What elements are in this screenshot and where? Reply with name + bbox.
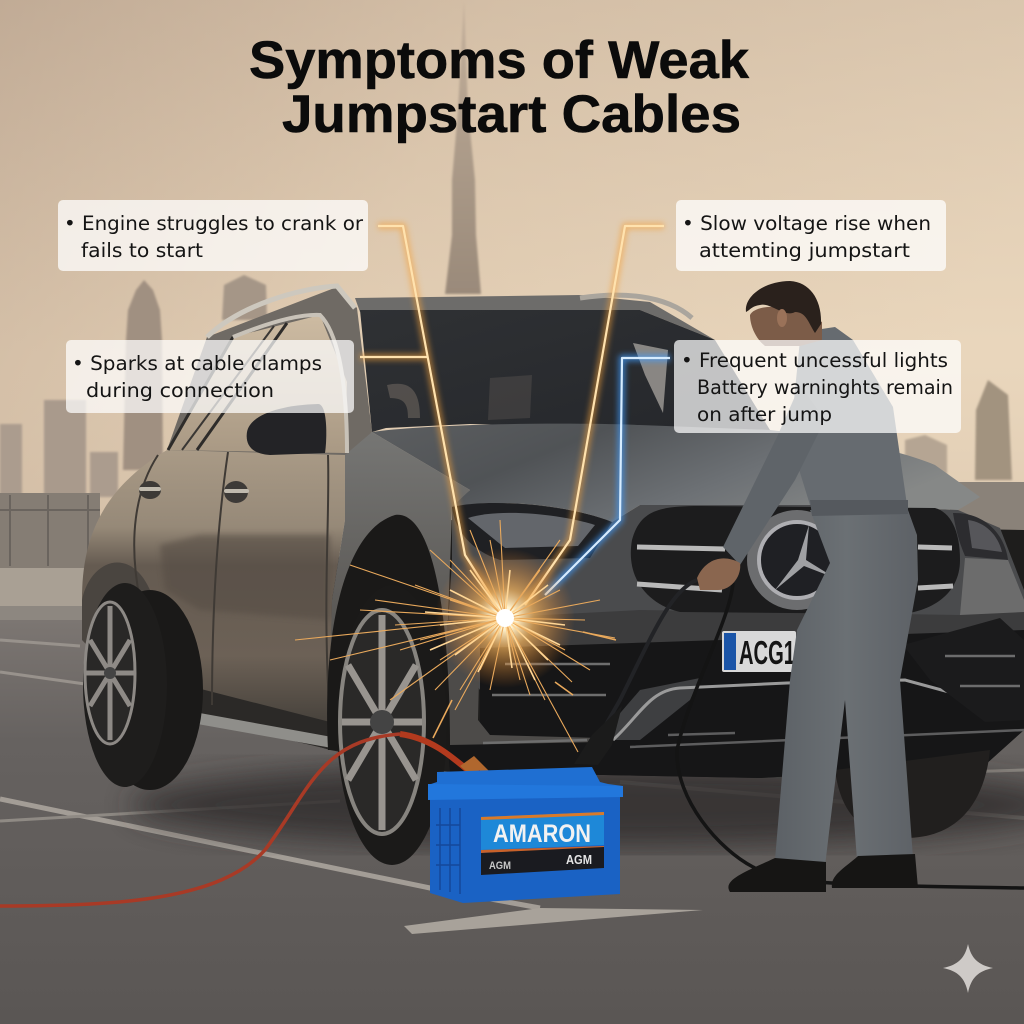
callout: warnings: [674, 340, 961, 433]
side mirror: [247, 404, 326, 455]
face and neck: [750, 307, 822, 346]
callout: engine: [58, 200, 368, 271]
city skyline: [0, 0, 1012, 504]
callout: warnings: Battery warninghts remain: [697, 376, 953, 399]
front fascia: [447, 503, 1024, 690]
car: [82, 286, 1024, 865]
license plate: [722, 631, 796, 672]
far rail: [580, 295, 692, 318]
emblem: [747, 510, 847, 610]
windshield: [360, 310, 770, 432]
neon callout lines: [360, 226, 670, 618]
torso: [790, 327, 907, 505]
black cable two: [677, 583, 1024, 888]
battery: AMARON: [493, 820, 591, 848]
callout: voltage: • Slow voltage rise when: [682, 212, 931, 235]
callout: sparks: during connection: [86, 379, 274, 402]
front wheel: [327, 515, 450, 865]
jumper cables: [0, 580, 1024, 906]
hand: [697, 558, 740, 590]
shoes: [728, 858, 826, 892]
car shadow: [130, 763, 1024, 847]
lower bumper black: [447, 630, 1024, 778]
license plate: ACG1: [739, 634, 795, 671]
side step: [172, 708, 332, 748]
battery top deck: [428, 767, 623, 795]
door seams: [134, 452, 330, 722]
hair: [746, 281, 821, 333]
sky background: [0, 0, 1024, 640]
headlight: [452, 503, 612, 560]
right lower mesh: [903, 618, 1024, 722]
chrome sweep: [597, 678, 1024, 747]
callout: sparks: • Sparks at cable clamps: [72, 352, 322, 375]
battery: [428, 767, 623, 903]
red cable: [0, 734, 400, 906]
battery body: [430, 795, 620, 903]
door reflection: [160, 535, 330, 620]
grille slats: [637, 547, 953, 590]
right bumper corner: [960, 558, 1024, 615]
far front wheel: [835, 750, 990, 838]
black cable one: [600, 580, 697, 735]
legs: [775, 510, 918, 866]
side lower panel: [447, 620, 600, 745]
battery label: [481, 812, 604, 850]
ear: [777, 309, 787, 327]
callout: warnings: on after jump: [697, 403, 832, 426]
fender: [328, 432, 470, 750]
bumper band: [447, 600, 1024, 650]
man: [697, 281, 918, 892]
belt: [810, 500, 908, 516]
lower grille slats: [483, 664, 610, 743]
windshield reflections: [387, 343, 668, 420]
arm: [723, 385, 825, 565]
callout: voltage: [676, 200, 946, 271]
icon: sparkle watermark: [943, 944, 993, 993]
callout: voltage: attemting jumpstart: [699, 239, 910, 262]
roof rail: [207, 286, 355, 337]
side windows: [167, 315, 347, 453]
handles: [139, 481, 249, 503]
title: [249, 31, 750, 144]
clamps: [458, 706, 622, 790]
rear arch: [82, 562, 175, 690]
car lower base: [120, 520, 1024, 778]
title: Symptoms of Weak: [249, 31, 750, 90]
roof upper frame: [167, 287, 372, 455]
callout: warnings: • Frequent uncessful lights: [681, 349, 948, 372]
sill: [158, 678, 332, 750]
door panels: [82, 450, 345, 725]
sparks: [295, 520, 616, 752]
railing and far ground: [0, 482, 1024, 622]
battery: AGM: [489, 860, 511, 872]
asphalt ground: [0, 620, 1024, 1024]
hood: [372, 424, 980, 522]
callout: engine: • Engine struggles to crank or: [64, 212, 364, 235]
callout: engine: fails to start: [81, 239, 203, 262]
battery: AGM: [566, 852, 592, 867]
roof: [355, 295, 715, 340]
grille: [631, 506, 960, 614]
right headlight: [953, 513, 1008, 560]
callout: sparks: [66, 340, 354, 413]
title: Jumpstart Cables: [282, 85, 741, 144]
rear wheel: [83, 583, 203, 790]
